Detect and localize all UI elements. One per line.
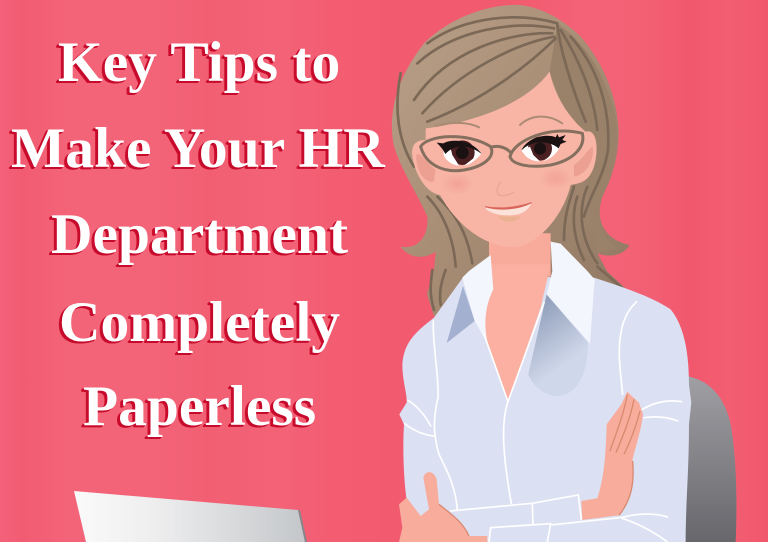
- left hand: [399, 472, 487, 542]
- right eye: [521, 134, 567, 161]
- laptop: [74, 491, 307, 542]
- shirt seams: [405, 302, 682, 542]
- collar shadow right: [528, 294, 588, 396]
- mouth: [485, 203, 532, 222]
- title line 1: Key Tips to: [58, 31, 340, 94]
- shirt: [399, 242, 691, 542]
- collar shadow left: [447, 286, 475, 343]
- chest skin: [484, 264, 551, 402]
- collar left: [462, 255, 493, 344]
- collar right: [547, 242, 595, 344]
- raised hand: [581, 392, 643, 520]
- title line 2: Make Your HR: [11, 117, 385, 180]
- chair back: [684, 376, 736, 542]
- eyebrows: [436, 117, 562, 127]
- left eye: [437, 140, 482, 166]
- title line 5: Paperless: [83, 375, 316, 438]
- ears: [416, 147, 593, 182]
- blush: [441, 172, 474, 196]
- nose: [497, 182, 514, 196]
- glasses: [421, 131, 583, 171]
- title line 3: Department: [51, 203, 348, 266]
- hair: [392, 5, 630, 316]
- face and neck: [412, 72, 597, 277]
- title line 4: Completely: [59, 291, 340, 354]
